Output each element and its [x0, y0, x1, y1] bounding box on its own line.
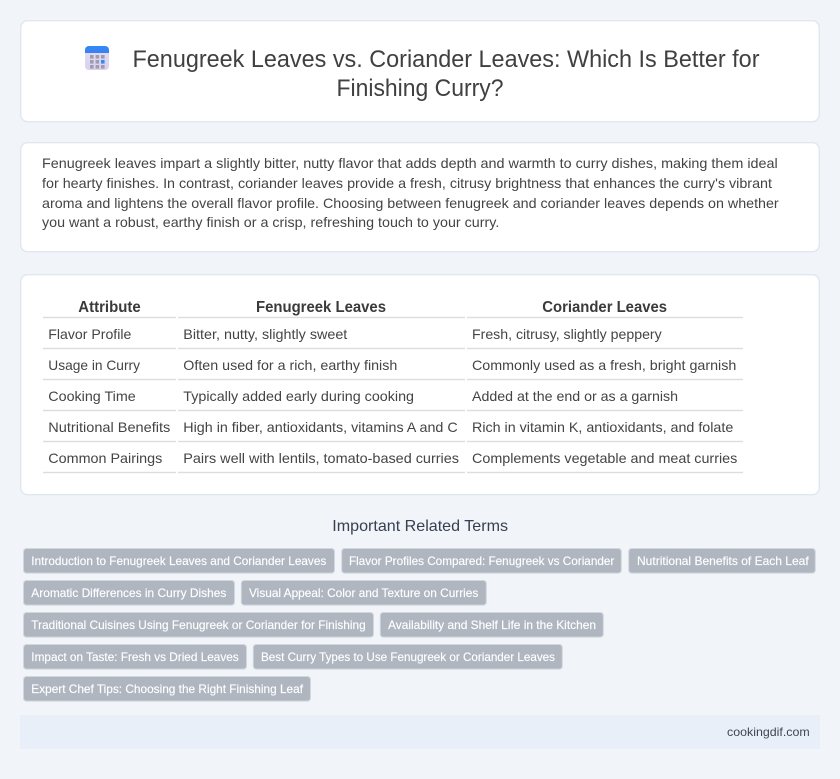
tag: traditional cuisines: Traditional Cuisines Using Fenugreek or Coriander for Finishing [31, 618, 366, 632]
title [132, 46, 760, 102]
table header row: Attribute [78, 299, 141, 316]
tag: best curry types [253, 644, 562, 669]
tag: visual appeal [241, 580, 486, 605]
row: usage in curry: Often used for a rich, earthy finish [183, 357, 397, 373]
tag: expert chef tips [24, 676, 310, 701]
tag: availability: Availability and Shelf Life in the Kitchen [388, 618, 596, 632]
row: cooking time: Typically added early during cooking [183, 388, 414, 404]
row: cooking time: Added at the end or as a garnish [472, 388, 678, 404]
intro paragraph: you want a robust, earthy finish or a crisp, refreshing touch to your curry. [42, 214, 499, 230]
tag: impact on taste [24, 644, 246, 669]
row: common pairings: Complements vegetable and meat curries [472, 450, 737, 466]
tag: expert chef tips: Expert Chef Tips: Choosing the Right Finishing Leaf [31, 682, 304, 696]
intro paragraph: for hearty finishes. In contrast, coriander leaves provide a fresh, citrusy brightness that enhances the curry's vibrant [42, 175, 772, 191]
tag: visual appeal: Visual Appeal: Color and Texture on Curries [249, 586, 478, 600]
row: nutritional benefits: Nutritional Benefits [48, 419, 170, 435]
tag: availability [380, 612, 603, 637]
row: common pairings: Pairs well with lentils, tomato-based curries [183, 450, 459, 466]
tag: nutritional benefits: Nutritional Benefits of Each Leaf [637, 554, 809, 568]
heading: important related terms: Important Related Terms [332, 518, 508, 535]
row: nutritional benefits: Rich in vitamin K, antioxidants, and folate [472, 419, 734, 435]
table header row [43, 299, 743, 318]
intro paragraph [42, 155, 779, 230]
panel: header [21, 21, 819, 122]
title: Fenugreek Leaves vs. Coriander Leaves: Which Is Better for [132, 46, 760, 73]
tag: introduction: Introduction to Fenugreek Leaves and Coriander Leaves [31, 554, 326, 568]
row: nutritional benefits [43, 419, 743, 442]
intro paragraph: aroma and lightens the overall flavor profile. Choosing between fenugreek and coriander leaves depends on whether [42, 195, 779, 211]
tag: aromatic differences [24, 580, 234, 605]
table header row: Coriander Leaves [542, 299, 667, 316]
row: usage in curry [43, 357, 743, 380]
row: flavor profile [43, 326, 743, 349]
title: Finishing Curry? [336, 75, 504, 102]
table header row: Fenugreek Leaves [256, 299, 386, 316]
footer site name: cookingdif.com [727, 725, 810, 739]
icon: calendar [85, 46, 109, 70]
row: cooking time: Cooking Time [48, 388, 136, 404]
row: common pairings: Common Pairings [48, 450, 162, 466]
panel: comparison table [21, 275, 819, 495]
tag: nutritional benefits [629, 548, 815, 573]
footer [20, 715, 820, 749]
panel: introduction [21, 143, 819, 252]
row: cooking time [43, 388, 743, 411]
tag: flavor profiles: Flavor Profiles Compared: Fenugreek vs Coriander [349, 554, 614, 568]
tag: traditional cuisines [24, 612, 374, 637]
row: nutritional benefits: High in fiber, antioxidants, vitamins A and C [183, 419, 458, 435]
row: common pairings [43, 450, 743, 473]
row: flavor profile: Bitter, nutty, slightly sweet [183, 326, 347, 342]
row: usage in curry: Usage in Curry [48, 357, 140, 373]
tag: aromatic differences: Aromatic Differences in Curry Dishes [31, 586, 226, 600]
row: usage in curry: Commonly used as a fresh, bright garnish [472, 357, 736, 373]
row: flavor profile: Fresh, citrusy, slightly peppery [472, 326, 662, 342]
tag: impact on taste: Impact on Taste: Fresh vs Dried Leaves [31, 650, 239, 664]
row: flavor profile: Flavor Profile [48, 326, 132, 342]
tag: introduction [24, 548, 334, 573]
intro paragraph: Fenugreek leaves impart a slightly bitter, nutty flavor that adds depth and warmth to curry dishes, making them ideal [42, 155, 778, 171]
panel: related term tags [24, 548, 815, 701]
tag: best curry types: Best Curry Types to Use Fenugreek or Coriander Leaves [261, 650, 555, 664]
tag: flavor profiles [342, 548, 621, 573]
